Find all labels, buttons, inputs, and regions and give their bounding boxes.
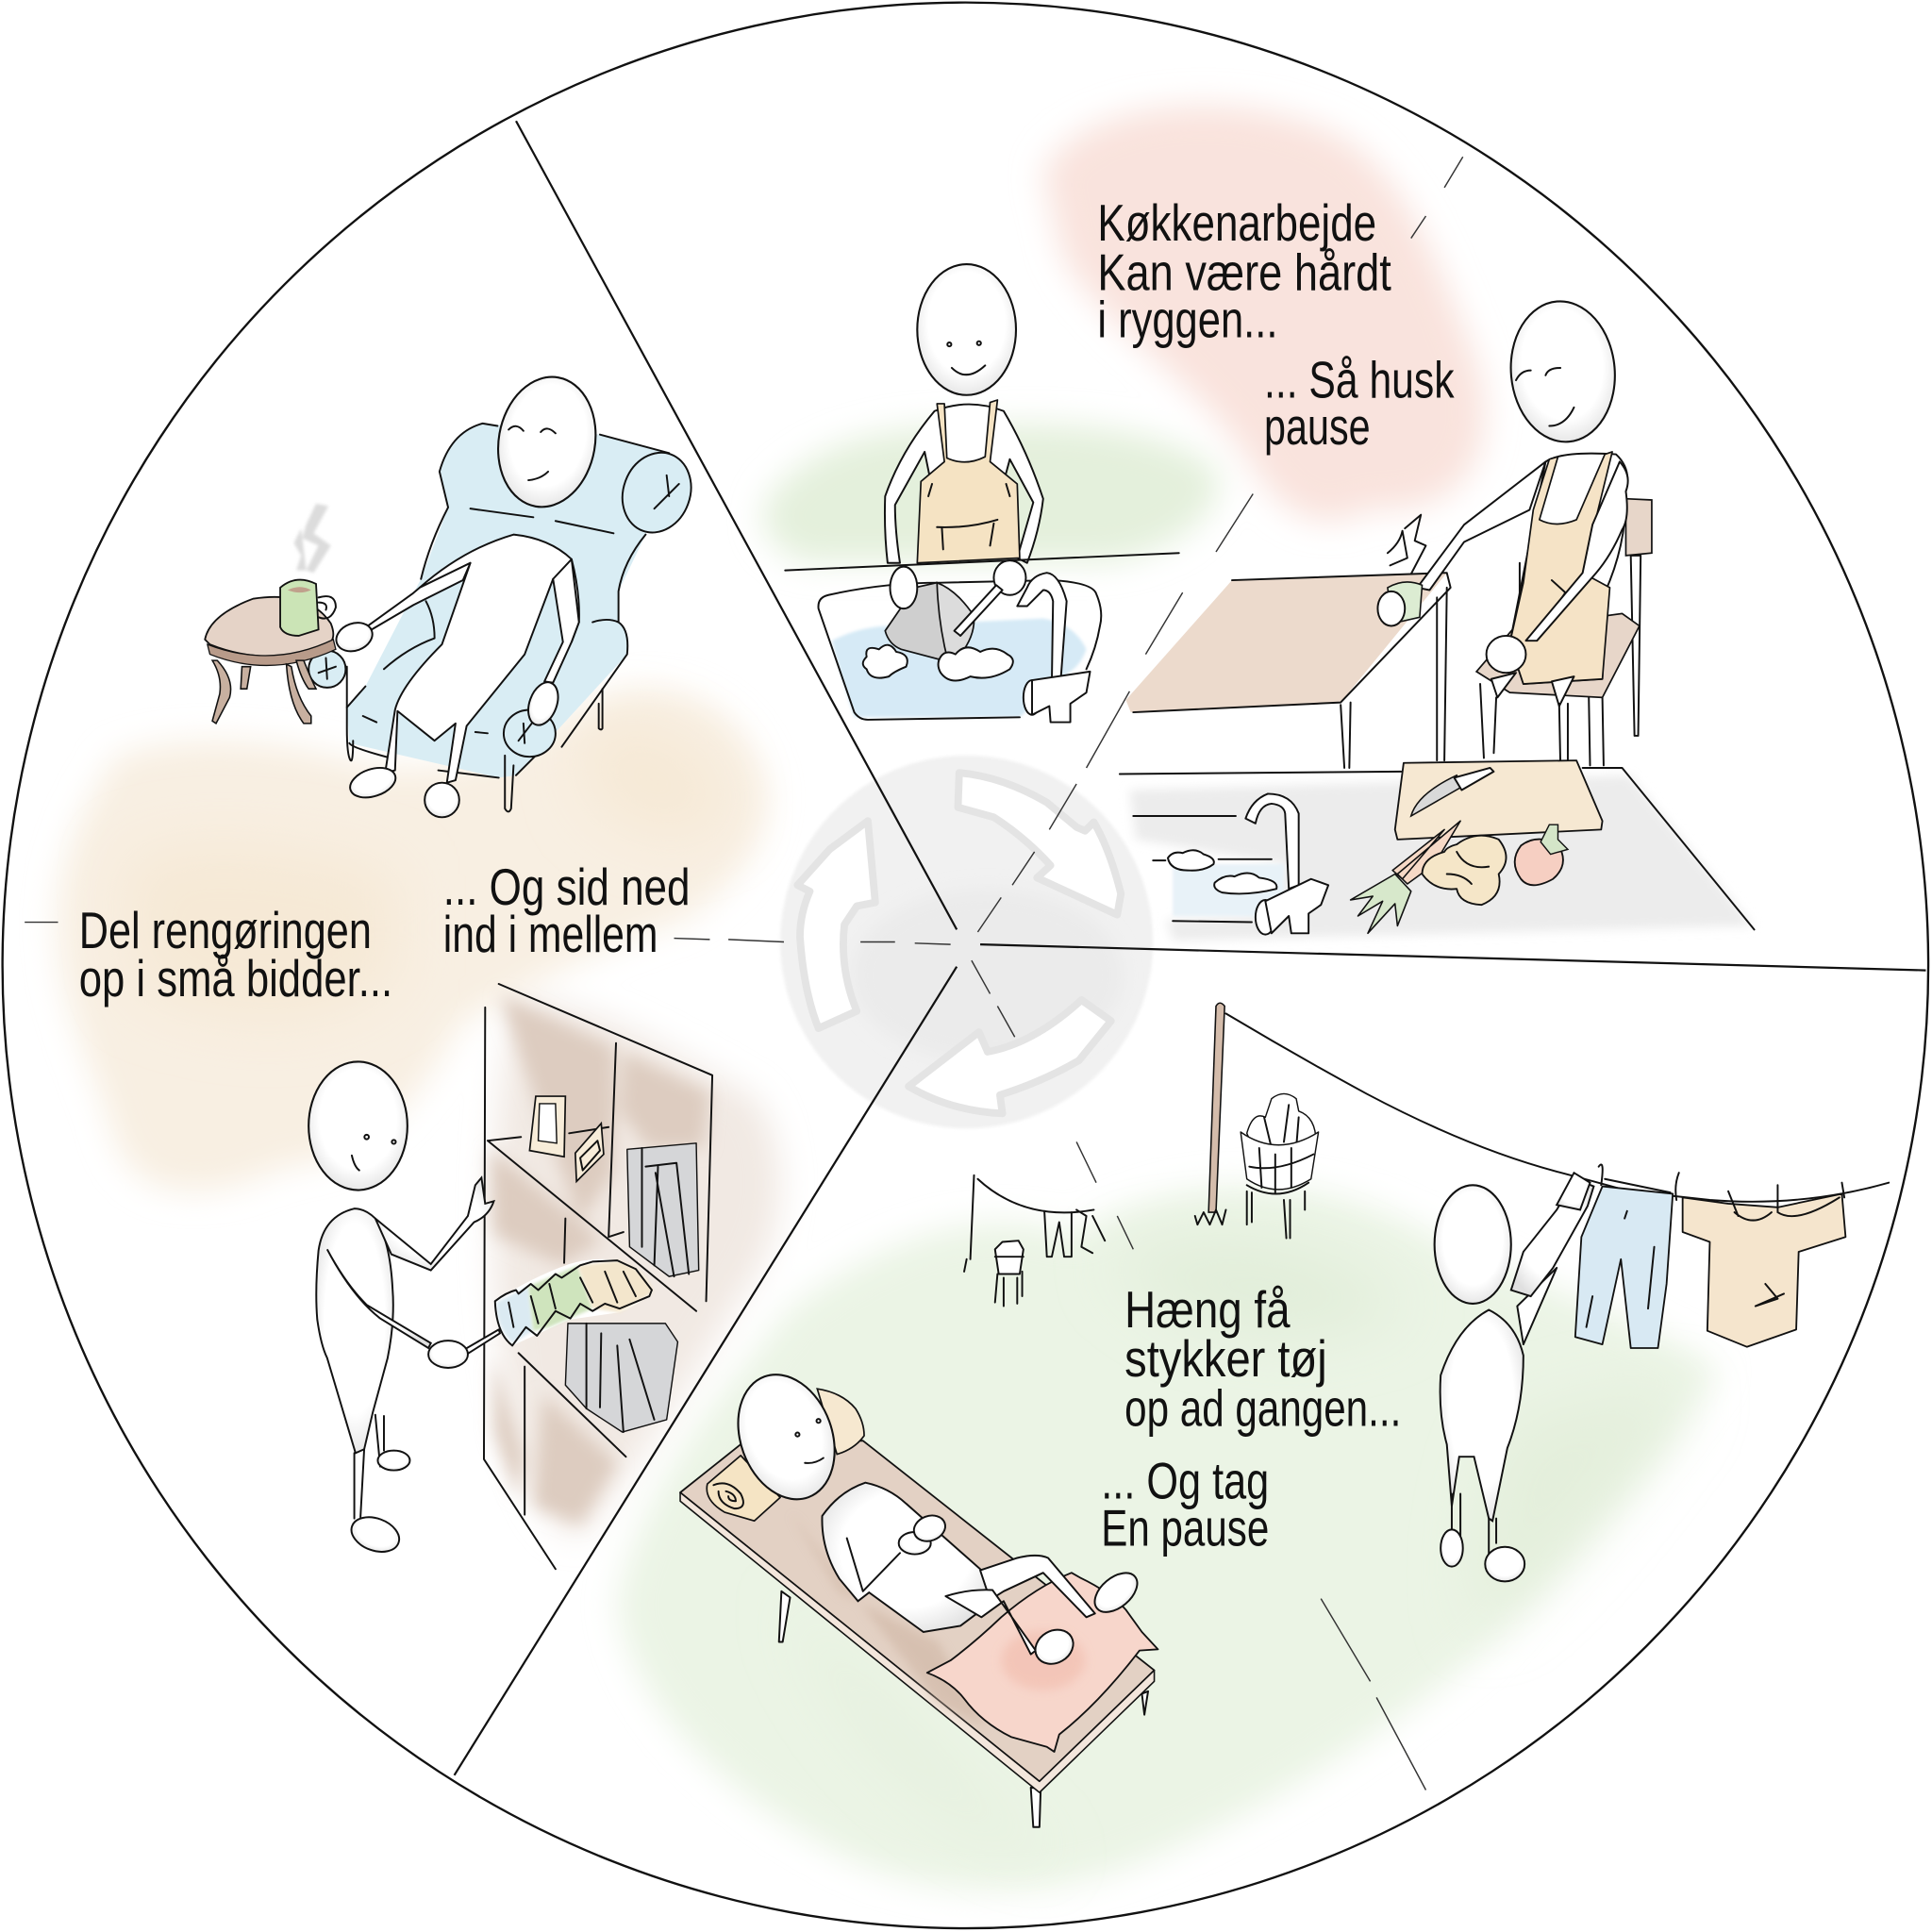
table [1125, 573, 1447, 712]
text: hang few clothes: Hæng få [1124, 1280, 1291, 1339]
feet [377, 1451, 409, 1471]
scene: person washing dishes [785, 264, 1179, 723]
faucet [1245, 793, 1299, 889]
arm on rest [544, 559, 579, 683]
arms [375, 1177, 493, 1271]
counter shadow [1129, 775, 1753, 941]
text: kitchen work: Køkkenarbejde [1097, 193, 1376, 252]
faucet [1017, 573, 1067, 684]
foam [1168, 850, 1214, 871]
picture frames [529, 1096, 565, 1157]
jeans [1575, 1187, 1673, 1348]
text: kitchen work: i ryggen... [1097, 290, 1277, 348]
sink water [1173, 864, 1284, 916]
rolled towel [707, 1456, 780, 1521]
armchair [308, 424, 702, 811]
clothesline [1225, 1013, 1889, 1202]
counter lines [1120, 768, 1755, 929]
hands [891, 567, 917, 608]
cutting board [1395, 760, 1603, 840]
sink [818, 580, 1101, 720]
person [1435, 1173, 1593, 1581]
side table [205, 597, 336, 724]
body [822, 1483, 991, 1632]
head [917, 264, 1016, 395]
person body with apron [885, 400, 1043, 563]
head pillow [817, 1389, 864, 1455]
dashed divider lines [25, 157, 1463, 1790]
text: hang few clothes: stykker tøj [1124, 1329, 1327, 1388]
pink pillow [927, 1573, 1158, 1752]
text: divide cleaning [79, 901, 392, 1008]
small distant laundry [964, 1175, 1105, 1307]
cup [280, 580, 319, 636]
legs [980, 1556, 1095, 1617]
foam [863, 645, 908, 678]
arrow: top right [958, 773, 1121, 915]
body [316, 1208, 393, 1453]
feather duster [460, 1259, 653, 1357]
t-shirt [1683, 1193, 1845, 1347]
arm to hand [368, 563, 471, 629]
bookshelf [484, 984, 712, 1569]
solid divider lines [455, 121, 1925, 1775]
head [488, 369, 606, 515]
cup and steam [1388, 582, 1423, 624]
knife [1411, 775, 1460, 816]
scene: kitchen counter with vegetables [1120, 760, 1755, 941]
person body [1509, 454, 1627, 684]
sink water [832, 619, 1087, 717]
scene: hanging laundry [964, 1003, 1889, 1581]
text: hang few clothes: En pause [1101, 1498, 1269, 1557]
laundry basket [1241, 1093, 1319, 1239]
text: kitchen work: pause [1264, 397, 1371, 456]
potatoes [1423, 836, 1507, 905]
text: divide cleaning: op i små bidder... [79, 949, 392, 1008]
text: sit down: ... Og sid ned [443, 858, 691, 916]
text: sit down [443, 858, 691, 963]
scene: person dusting bookshelf [308, 984, 712, 1569]
bowl [885, 583, 948, 661]
text: hang few clothes: op ad gangen... [1124, 1378, 1401, 1437]
arm to lap [1525, 461, 1628, 641]
scene: person resting in armchair [205, 369, 702, 817]
text: divide cleaning: Del rengøringen [79, 901, 372, 959]
text: hang few clothes: ... Og tag [1101, 1452, 1269, 1510]
text: kitchen work: Kan være hårdt [1097, 243, 1391, 302]
body [385, 535, 579, 783]
arm to cup [1417, 461, 1545, 591]
bench legs [779, 1591, 1148, 1827]
chair [1476, 499, 1652, 765]
text: hang few clothes [1101, 1280, 1401, 1557]
head [308, 1061, 408, 1191]
pole [1208, 1003, 1224, 1212]
arrow: bottom [908, 1000, 1111, 1113]
scene: person lying on bench [680, 1361, 1158, 1827]
watercolor washes [58, 106, 1719, 1890]
legs [355, 1415, 384, 1519]
scene: person taking a break at table [1125, 297, 1652, 768]
bell pepper [1515, 840, 1563, 885]
text: kitchen work: ... Så husk [1264, 350, 1455, 408]
text: sit down: ind i mellem [443, 905, 658, 963]
carrots [1392, 821, 1460, 884]
steam [293, 504, 331, 573]
books [627, 1143, 699, 1276]
bench [680, 1441, 1155, 1781]
brush [955, 585, 1003, 636]
counter line [785, 553, 1179, 571]
centre cycle emblem [780, 756, 1153, 1128]
arrow: left [797, 821, 875, 1028]
head [1505, 297, 1621, 446]
text: kitchen work [1097, 193, 1455, 456]
feet [346, 762, 399, 803]
head [722, 1361, 851, 1513]
